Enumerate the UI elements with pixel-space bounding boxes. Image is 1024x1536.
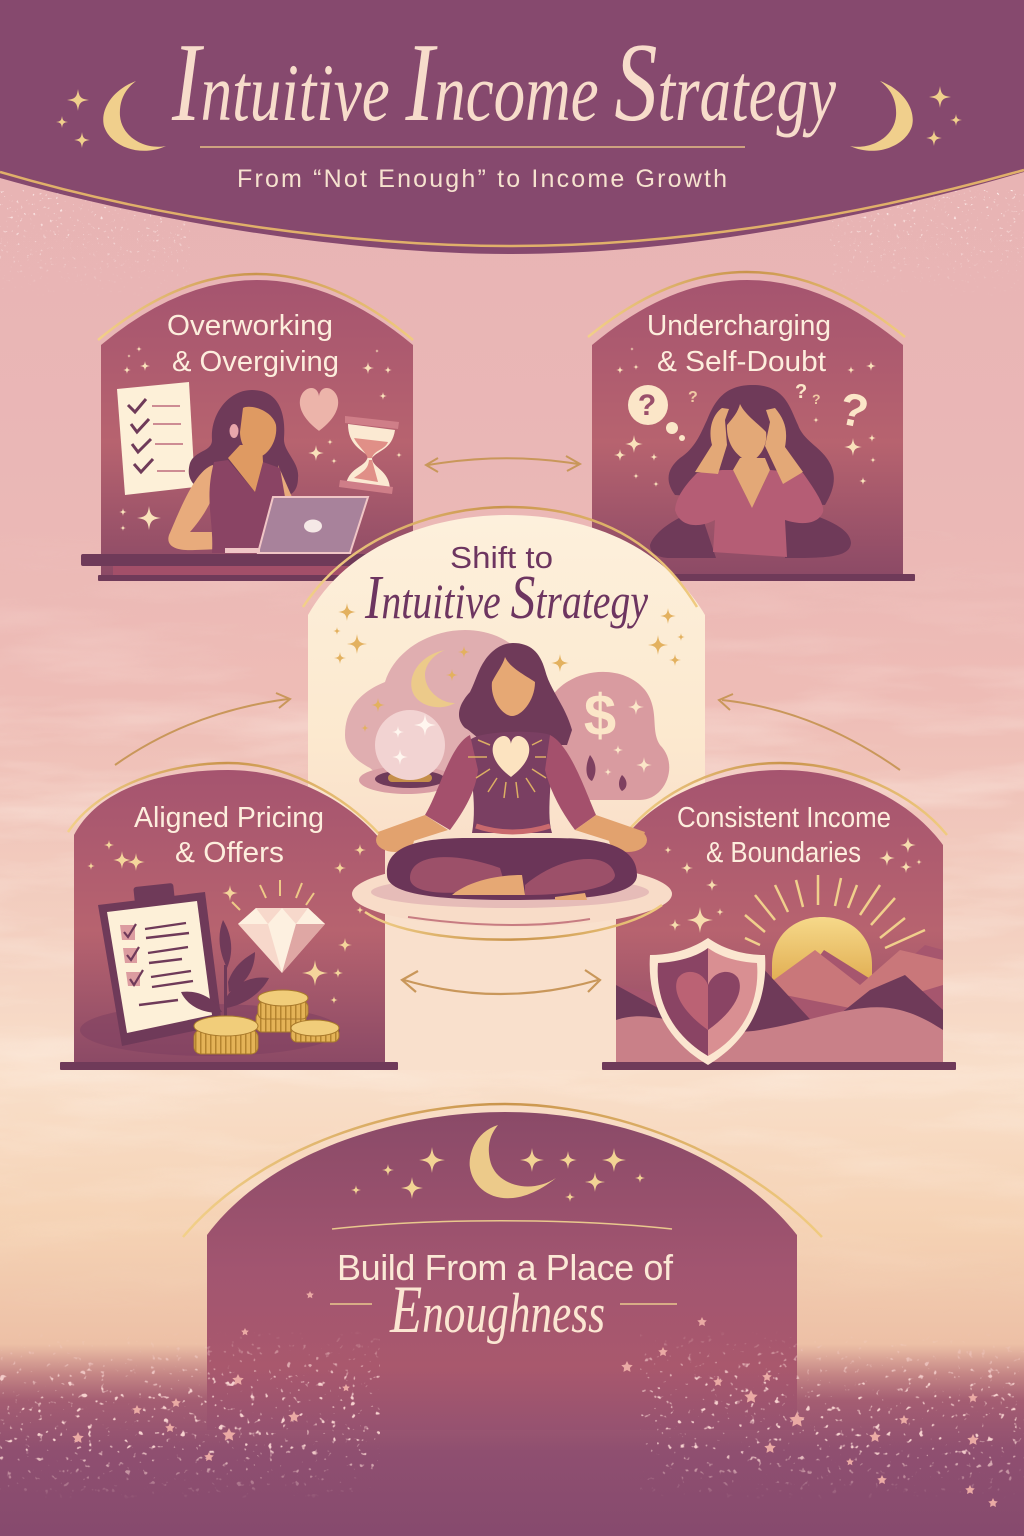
heading: aligned pricing: & Offers (175, 837, 284, 869)
sparkles (351, 1147, 645, 1202)
title: Intuitive Income Strategy (171, 21, 836, 145)
icon: crescent moon (470, 1125, 556, 1198)
header banner (0, 0, 1024, 254)
icon: checklist (117, 382, 195, 495)
arrow: top row (426, 456, 580, 472)
illustration: meditating woman (352, 643, 672, 940)
heading: aligned pricing (134, 802, 324, 869)
icon: hourglass (339, 416, 399, 494)
sparkles (87, 840, 366, 1004)
icon: glowing heart (468, 736, 546, 798)
heading: enoughness: Enoughness (389, 1271, 605, 1347)
icon: rising sun (745, 875, 925, 985)
panel: aligned pricing and offers (60, 763, 398, 1070)
heading: shift to: Shift to (450, 540, 553, 575)
icon: right moon and stars (850, 81, 962, 151)
panel: consistent income and boundaries (602, 763, 956, 1070)
sparkles (333, 603, 685, 732)
heading: undercharging: Undercharging (647, 310, 831, 342)
illustration: money cloud: $ (584, 683, 616, 748)
panel: overworking and overgiving (81, 274, 413, 581)
icon: question marks: ? (638, 389, 656, 422)
heading: overworking: Overworking (167, 310, 333, 342)
illustration: intuition cloud (345, 630, 530, 794)
icon: question marks (628, 381, 873, 441)
illustration: money cloud (545, 672, 669, 800)
heading: consistent income: & Boundaries (706, 837, 861, 869)
illustration: woman at laptop (168, 390, 368, 553)
icon: left moon and stars (56, 81, 166, 151)
heading: consistent income (677, 802, 891, 869)
icon: plant (181, 920, 269, 1025)
heading: undercharging: & Self-Doubt (657, 346, 826, 378)
heading: overworking (167, 310, 339, 378)
heading: aligned pricing: Aligned Pricing (134, 802, 324, 834)
icon: heart shield (650, 938, 765, 1065)
arrow: right up (719, 694, 900, 770)
platform (352, 861, 672, 940)
icon: question marks: ? (688, 389, 698, 406)
icon: question marks: ? (812, 391, 821, 407)
icon: question marks: ? (795, 381, 807, 403)
icon: diamond (232, 880, 325, 973)
icon: heart (300, 388, 338, 431)
heading: undercharging (647, 310, 831, 378)
illustration: mountains (616, 945, 943, 1062)
heading: overworking: & Overgiving (172, 346, 339, 378)
heading: consistent income: Consistent Income (677, 802, 891, 834)
icon: clipboard (80, 883, 340, 1056)
sparkles (614, 347, 876, 487)
panel: undercharging and self-doubt (588, 272, 915, 581)
heading: build from a place of: Build From a Place of (337, 1247, 674, 1288)
desk (81, 554, 371, 581)
icon: coins (194, 990, 339, 1054)
icon: question marks: ? (835, 382, 873, 438)
sparkles (664, 837, 922, 933)
sparkles (119, 346, 402, 531)
subtitle: From “Not Enough” to Income Growth (237, 165, 727, 193)
illustration: worried woman (650, 385, 851, 558)
heading: intuitive strategy: Intuitive Strategy (364, 564, 649, 632)
ground speckle stars (0, 1291, 1024, 1507)
panel: build from a place of enoughness (183, 1104, 822, 1430)
panel: shift to intuitive strategy (303, 507, 705, 1070)
arrow: left up (115, 693, 290, 765)
arrow: bottom double (402, 970, 600, 994)
